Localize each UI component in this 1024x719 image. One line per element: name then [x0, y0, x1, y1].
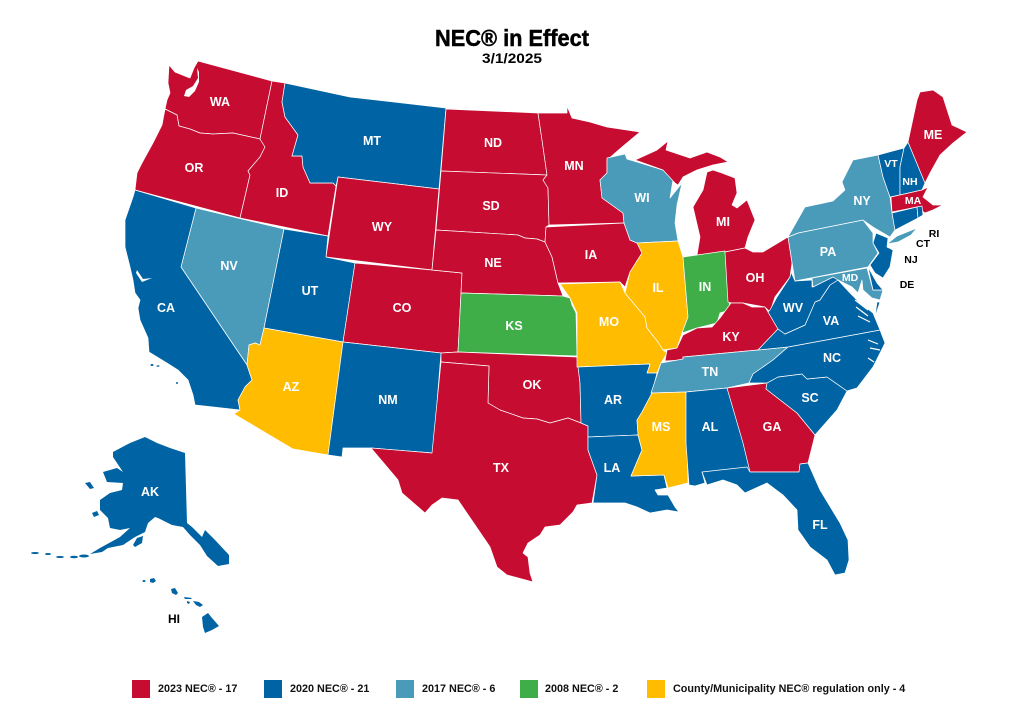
state: AR: AR [604, 393, 622, 407]
state: PA: PA [820, 245, 836, 259]
state: WA [165, 61, 272, 139]
Virginia eastern shore [875, 302, 880, 317]
state: WY: WY [372, 220, 393, 234]
legend item: 2023 NEC: 2023 NEC® - 17 [158, 683, 237, 695]
state: NY [788, 155, 917, 244]
state: TX [371, 362, 597, 582]
state: AK [31, 437, 229, 566]
state: NH [900, 142, 925, 195]
state: CT [892, 207, 918, 230]
state map [31, 61, 967, 633]
outside labels: NJ [904, 254, 918, 266]
state: ME: ME [924, 128, 942, 142]
legend item: 2023 NEC [132, 680, 237, 698]
state: UT: UT [302, 284, 319, 298]
state: MI: MI [716, 215, 730, 229]
state: MI [635, 141, 755, 255]
outside labels: DE [900, 279, 914, 291]
state: RI [917, 206, 923, 218]
legend item: 2020 NEC [264, 680, 369, 698]
legend item: 2020 NEC: 2020 NEC® - 21 [290, 683, 369, 695]
state: KY [665, 303, 778, 361]
state: IN: IN [699, 280, 711, 294]
state: FL: FL [812, 518, 828, 532]
state: CA: CA [157, 301, 175, 315]
state: IN [682, 251, 730, 333]
title: NEC® in Effect [435, 25, 589, 51]
state: NV [181, 208, 284, 365]
state: PA [788, 220, 878, 281]
state: TN [651, 347, 788, 393]
state: WV [768, 272, 838, 334]
state: IL [625, 241, 688, 350]
state: MT [282, 83, 446, 189]
state: WV: WV [783, 301, 804, 315]
state: OH: OH [746, 271, 764, 285]
legend item: County/Municipality: County/Municipality NEC® regulation only - 4 [673, 683, 905, 695]
state: ND [441, 109, 547, 175]
state: AL [686, 388, 750, 486]
legend [132, 680, 905, 698]
state: TN: TN [702, 365, 718, 379]
state: NH: NH [902, 176, 918, 188]
state: NC: NC [823, 351, 841, 365]
state: OK: OK [523, 378, 541, 392]
outside labels: CT [916, 238, 931, 250]
state: KS: KS [505, 319, 523, 333]
state: SC [766, 374, 847, 435]
state: CO: CO [393, 301, 412, 315]
state: NV: NV [220, 259, 238, 273]
state: GA [727, 383, 815, 472]
state: WA: WA [210, 95, 230, 109]
state: UT [264, 229, 355, 342]
state: NY: NY [853, 194, 871, 208]
Pamlico Sound [868, 340, 880, 362]
state: NM [328, 342, 441, 457]
state: OK [441, 352, 581, 423]
state: DE [868, 267, 883, 290]
state: WI: WI [634, 191, 650, 205]
state: FL [702, 463, 849, 575]
outside labels [900, 228, 939, 291]
state: MS: MS [652, 420, 670, 434]
state: MO [560, 282, 667, 373]
state: CO [343, 263, 462, 353]
state: AZ [234, 328, 343, 455]
Virginia tidal rivers [855, 300, 870, 322]
state: SC: SC [801, 391, 819, 405]
legend item: County/Municipality [647, 680, 905, 698]
Puget Sound [184, 68, 199, 97]
state: VA [758, 280, 880, 350]
state: KS [458, 293, 577, 356]
state: MA [891, 187, 943, 213]
state: OH [725, 237, 792, 312]
legend item: 2008 NEC [520, 680, 618, 698]
state: VT [878, 148, 904, 197]
state: ME [908, 90, 967, 183]
state: AK: AK [141, 485, 159, 499]
state: VA: VA [823, 314, 839, 328]
state: OR [135, 109, 265, 218]
state: GA: GA [763, 420, 781, 434]
state: HI [142, 578, 219, 633]
state: IA: IA [585, 248, 597, 262]
state: WY [326, 177, 439, 270]
state: MA: MA [905, 195, 922, 207]
state: NM: NM [378, 393, 398, 407]
state: AL: AL [702, 420, 719, 434]
state: MN: MN [564, 159, 584, 173]
state: ND: ND [484, 136, 502, 150]
state: CA [125, 190, 252, 410]
state: AZ: AZ [283, 380, 300, 394]
state: IL: IL [652, 281, 664, 295]
legend item: 2008 NEC: 2008 NEC® - 2 [545, 683, 618, 695]
state: ID: ID [276, 186, 288, 200]
state: LA [588, 435, 679, 513]
state: MS [631, 392, 688, 488]
state: MO: MO [599, 315, 619, 329]
state: LA: LA [604, 461, 620, 475]
state: WI [600, 154, 682, 243]
state: MT: MT [363, 134, 381, 148]
state: SD [436, 171, 549, 242]
state: TX: TX [493, 461, 510, 475]
state: NE [432, 230, 563, 296]
state: MD [812, 268, 883, 300]
state: NE: NE [484, 256, 502, 270]
state: HI: HI [168, 612, 180, 626]
state: MD: MD [842, 272, 859, 284]
outside labels: RI [929, 228, 939, 240]
San Francisco Bay [136, 270, 152, 282]
state: SD: SD [482, 199, 500, 213]
state: NJ [870, 233, 893, 278]
state: VT: VT [884, 158, 898, 170]
state: MN [538, 106, 640, 225]
state: ID [240, 81, 336, 236]
state: KY: KY [722, 330, 740, 344]
state: OR: OR [185, 161, 203, 175]
legend item: 2017 NEC [396, 680, 495, 698]
state: IA [545, 223, 642, 287]
state: NC [749, 330, 885, 391]
legend item: 2017 NEC: 2017 NEC® - 6 [422, 683, 495, 695]
state: AR [578, 364, 657, 437]
date subtitle: 3/1/2025 [482, 50, 542, 66]
